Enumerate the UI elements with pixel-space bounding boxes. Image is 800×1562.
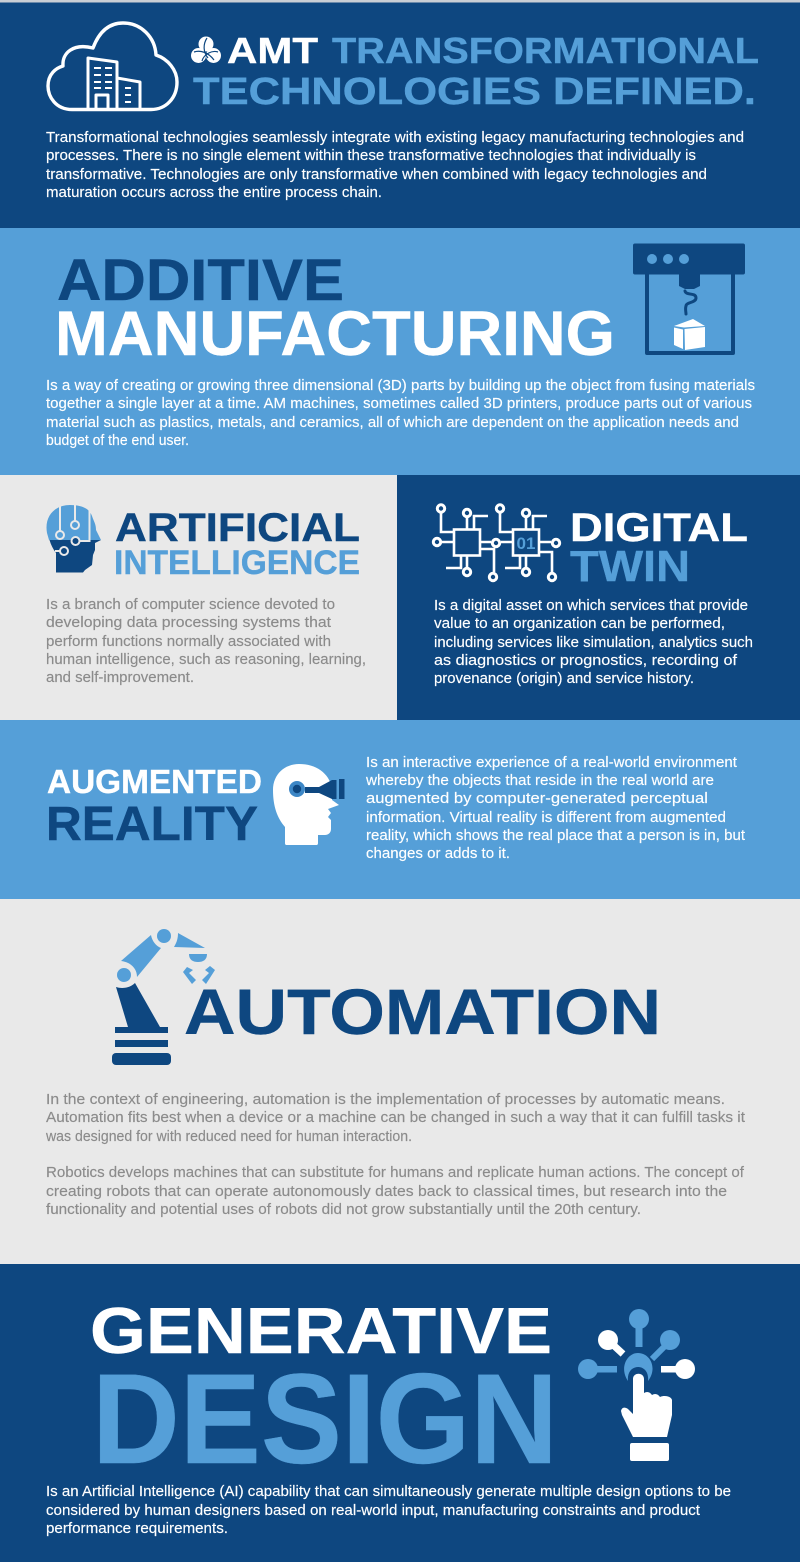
text block: AI description: perform functions normally associated with	[46, 634, 331, 650]
panel: generative design	[0, 1264, 800, 1562]
icon: VR head	[273, 764, 344, 845]
heading: AMT: AMT	[227, 30, 318, 71]
text block: header description: processes. There is no single element within these transformative technologies that individually is	[46, 148, 696, 164]
text block: digital twin description: Is a digital asset on which services that provide	[434, 598, 748, 614]
heading: Artificial: ARTIFICIAL	[115, 506, 360, 550]
text block: AI description: human intelligence, such as reasoning, learning,	[46, 652, 366, 668]
heading: Reality: REALITY	[46, 798, 258, 851]
panel: digital twin	[397, 475, 800, 720]
text block: additive manufacturing description: budget of the end user.	[46, 433, 189, 449]
text block: header description	[46, 130, 744, 201]
heading: Digital: DIGITAL	[570, 506, 748, 550]
text block: additive manufacturing description	[46, 378, 755, 449]
heading: Augmented: AUGMENTED	[47, 763, 262, 800]
text block: AI description	[46, 597, 366, 686]
panel: augmented reality	[0, 720, 800, 899]
panel: header	[0, 2, 800, 228]
icon: circuit chips	[433, 505, 560, 581]
text block: automation description	[45, 1092, 745, 1145]
text block: digital twin description	[434, 598, 753, 687]
text block: generative design description: considered by human designers based on real-world input, manufacturing constraints and product	[46, 1503, 700, 1519]
text block: digital twin description: value to an organization can be performed,	[434, 616, 725, 632]
text block: augmented reality description: whereby the objects that reside in the real world are	[365, 773, 714, 789]
heading: Intelligence: INTELLIGENCE	[114, 544, 360, 582]
text block: robotics description: Robotics develops machines that can substitute for humans and replicate human actions. The concept of	[46, 1165, 745, 1181]
text block: generative design description: Is an Artificial Intelligence (AI) capability that can simultaneously generate multiple design options to be	[46, 1484, 731, 1500]
text block: generative design description	[46, 1484, 731, 1537]
panel: artificial intelligence	[0, 475, 397, 720]
heading: Twin: TWIN	[570, 542, 690, 591]
heading: Automation: AUTOMATION	[184, 976, 661, 1048]
text block: robotics description: functionality and potential uses of robots did not grow substantially until the 20th century.	[46, 1202, 641, 1218]
text block: header description: maturation occurs across the entire process chain.	[46, 185, 382, 201]
text block: additive manufacturing description: Is a way of creating or growing three dimensional (3D) parts by building up the object from fusing materials	[46, 378, 755, 394]
text block: generative design description: performance requirements.	[46, 1521, 228, 1537]
text block: augmented reality description	[365, 755, 745, 862]
text block: digital twin description: including services like simulation, analytics such	[434, 635, 753, 651]
icon: circuit chips: 01	[517, 534, 535, 553]
heading: Generative: GENERATIVE	[90, 1294, 552, 1367]
heading: Manufacturing: MANUFACTURING	[55, 299, 615, 369]
text block: additive manufacturing description: material such as plastics, metals, and ceramics, all of which are dependent on the application needs and	[46, 415, 739, 431]
text block: header description: transformative. Technologies are only transformative when combined with legacy technologies and	[46, 167, 707, 183]
text block: additive manufacturing description: together a single layer at a time. AM machines, sometimes called 3D printers, produce parts out of various	[46, 396, 752, 412]
text block: AI description: Is a branch of computer science devoted to	[46, 597, 335, 613]
text block: augmented reality description: changes or adds to it.	[366, 846, 510, 862]
icon: robot arm	[112, 929, 215, 1065]
text block: automation description: In the context of engineering, automation is the implementation of processes by automatic means.	[46, 1092, 725, 1108]
text block: header description: Transformational technologies seamlessly integrate with existing legacy manufacturing technologies and	[46, 130, 744, 146]
text block: augmented reality description: Is an interactive experience of a real-world environment	[366, 755, 737, 771]
text block: automation description: Automation fits best when a device or a machine can be changed in such a way that it can fulfill tasks it	[46, 1110, 745, 1126]
heading: Additive: ADDITIVE	[57, 248, 344, 313]
heading: Transformational: TRANSFORMATIONAL	[332, 30, 759, 71]
panel: automation	[0, 899, 800, 1264]
text block: robotics description	[46, 1165, 745, 1218]
icon: AI head	[47, 505, 101, 572]
icon: 3D printer	[633, 244, 745, 353]
text block: robotics description: creating robots that can operate autonomously dates back to classical times, but research into the	[46, 1184, 727, 1200]
text block: AI description: and self-improvement.	[46, 670, 194, 686]
text block: automation description: was designed for with reduced need for human interaction.	[45, 1129, 412, 1145]
icon: hand touching nodes	[578, 1309, 695, 1461]
text block: digital twin description: as diagnostics or prognostics, recording of	[434, 653, 738, 669]
text block: augmented reality description: augmented by computer-generated perceptual	[366, 791, 708, 807]
text block: AI description: developing data processing systems that	[46, 615, 331, 631]
text block: digital twin description: provenance (origin) and service history.	[434, 671, 694, 687]
panel: additive manufacturing	[0, 228, 800, 475]
heading: Technologies defined: TECHNOLOGIES DEFINED.	[193, 71, 756, 113]
heading: Design: DESIGN	[92, 1348, 558, 1491]
icon: AMT logo	[191, 36, 221, 63]
text block: augmented reality description: information. Virtual reality is different from augmented	[366, 810, 726, 826]
text block: augmented reality description: reality, which shows the real place that a person is in, but	[366, 828, 745, 844]
icon: cloud with buildings	[48, 23, 177, 110]
